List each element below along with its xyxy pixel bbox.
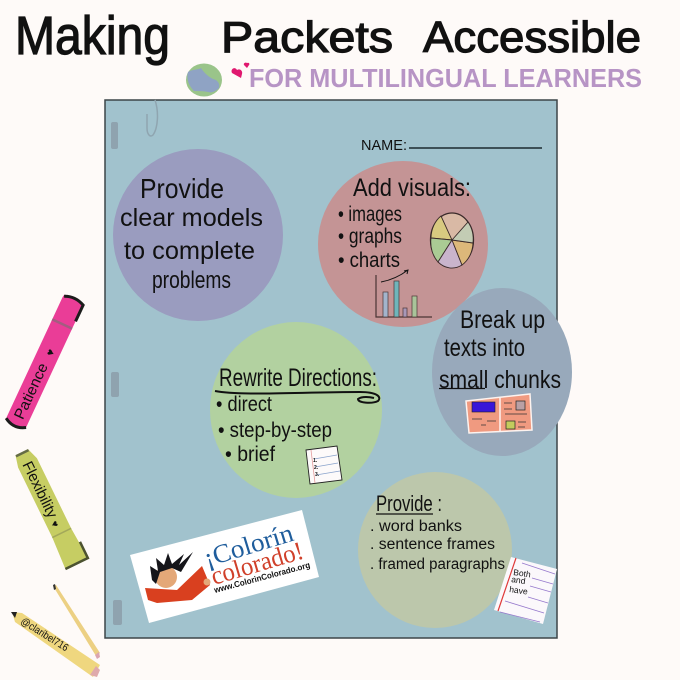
pencil	[53, 584, 100, 659]
icon: bar chart	[376, 270, 432, 317]
panel: rewrite directions: • direct	[216, 393, 272, 416]
icon: sentence frames note	[494, 557, 557, 624]
panel: break up texts: texts into	[444, 334, 525, 362]
panel: worksheet paper	[105, 100, 572, 638]
pencil with handle	[11, 612, 100, 677]
icon: paper clip	[147, 100, 157, 136]
panel: break up texts: small chunks	[439, 366, 561, 394]
name line: NAME:	[361, 137, 407, 154]
title: Making	[15, 6, 170, 66]
icon: numbered list note: 2.	[314, 465, 319, 471]
marker: patience	[4, 294, 84, 431]
title	[15, 6, 641, 66]
logo: Colorin Colorado: colorado!	[207, 536, 307, 591]
icon: open book spread	[466, 394, 532, 433]
panel: provide clear models	[113, 149, 283, 321]
marker: flexibility: ♥	[48, 519, 60, 529]
logo: Colorin Colorado: ¡Colorín	[200, 518, 297, 573]
pencil with handle: @claribel716	[18, 615, 71, 654]
panel: provide clear models: clear models	[120, 204, 263, 232]
panel: rewrite directions: Rewrite Directions:	[219, 364, 377, 392]
panel: provide supports: Provide :	[376, 491, 442, 516]
panel: provide clear models: to complete	[124, 237, 255, 265]
panel: provide supports	[358, 472, 557, 628]
icon: numbered list note: 1.	[313, 458, 318, 464]
panel: rewrite directions	[210, 322, 382, 498]
marker: flexibility: Flexibility	[19, 459, 61, 521]
subtitle: FOR MULTILINGUAL LEARNERS	[249, 63, 642, 93]
panel: add visuals: • charts	[338, 249, 400, 272]
panel: add visuals: Add visuals:	[353, 174, 471, 202]
panel: provide supports: . word banks	[370, 518, 462, 535]
panel: add visuals	[318, 161, 488, 327]
icon: pie chart	[430, 213, 474, 268]
logo: Colorin Colorado: www.ColorinColorado.org	[212, 560, 311, 595]
panel: rewrite directions: • step-by-step	[218, 419, 332, 442]
logo: Colorin Colorado	[130, 510, 319, 623]
panel: provide supports: . framed paragraphs	[370, 556, 505, 573]
title: Accessible	[423, 13, 641, 62]
marker: patience: Patience	[11, 361, 52, 422]
marker: patience: ♥	[44, 347, 58, 358]
cartoon reader with red book	[145, 552, 210, 603]
panel: add visuals: • images	[338, 203, 402, 226]
panel: add visuals: • graphs	[338, 225, 402, 248]
marker: flexibility	[11, 447, 88, 569]
title: Packets	[221, 13, 393, 62]
icon: sentence frames note: and	[511, 574, 526, 586]
panel: break up texts	[432, 288, 572, 456]
icon: sentence frames note: have	[509, 584, 529, 597]
icon: globe	[186, 64, 222, 96]
panel: provide clear models: problems	[152, 267, 231, 294]
icon: numbered list note: 3.	[315, 472, 320, 478]
icon: sentence frames note: Both	[513, 567, 532, 579]
icon: hearts	[232, 63, 249, 78]
panel: break up texts: Break up	[460, 306, 545, 334]
panel: provide clear models: Provide	[140, 173, 224, 204]
panel: rewrite directions: • brief	[225, 443, 275, 466]
icon: numbered list note	[306, 446, 342, 484]
panel: provide supports: . sentence frames	[370, 536, 495, 553]
binder holes	[111, 122, 122, 625]
